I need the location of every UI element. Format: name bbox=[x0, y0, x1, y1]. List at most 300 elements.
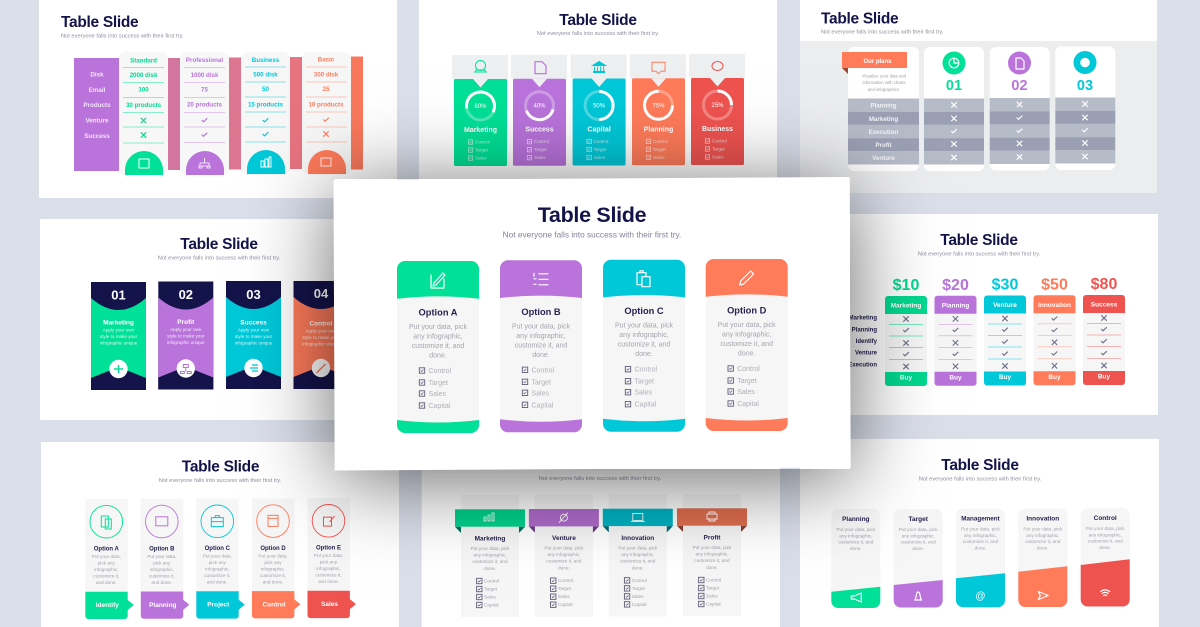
card Marketing: Target bbox=[484, 586, 498, 592]
plans label column: Planning bbox=[870, 102, 897, 110]
column $30 Venture bbox=[984, 276, 1026, 386]
option title: Option A bbox=[419, 308, 458, 318]
checklist: Target bbox=[532, 379, 551, 386]
card Profit bbox=[677, 494, 747, 616]
subtitle: Not everyone falls into success with their first try. bbox=[537, 31, 660, 37]
checklist bbox=[419, 368, 452, 410]
card 04 Control: Control bbox=[309, 320, 333, 328]
column: Basic: 25 bbox=[323, 86, 330, 93]
column $20 Planning bbox=[934, 277, 976, 386]
column $50 Innovation: $50 bbox=[1041, 276, 1068, 293]
card 02 Profit: style to make your bbox=[167, 334, 205, 338]
card Innovation: done. bbox=[632, 565, 644, 570]
card 02 Profit: infographic unique bbox=[167, 340, 205, 345]
column: Business: 500 disk bbox=[253, 72, 278, 78]
description: any infographic, bbox=[516, 333, 566, 340]
row label column: Venture bbox=[85, 118, 109, 124]
card Management: @ bbox=[975, 591, 986, 602]
card: Planning: Control bbox=[653, 139, 668, 144]
icon: pencil bbox=[740, 271, 754, 285]
description: customize it, and bbox=[618, 342, 670, 349]
column: Professional bbox=[180, 52, 229, 175]
card 01 Marketing: infographic unique bbox=[100, 340, 138, 346]
option E Sales: and done. bbox=[318, 579, 339, 584]
card 04 Control: infographic unique bbox=[302, 342, 340, 346]
card Planning: any infographic, bbox=[839, 534, 872, 538]
description: Put your data, pick bbox=[512, 323, 570, 330]
card Innovation: Sales bbox=[632, 594, 644, 599]
card Innovation: Innovation bbox=[1026, 516, 1059, 522]
column $10 Marketing: Buy bbox=[900, 374, 913, 382]
description: done. bbox=[429, 352, 447, 360]
option C Project: Put your data, bbox=[203, 554, 232, 559]
card Control: Put your data, pick bbox=[1086, 526, 1125, 531]
option C Project: and done. bbox=[207, 580, 228, 585]
card: Success: Success bbox=[525, 127, 554, 134]
option C Project bbox=[196, 499, 245, 619]
option C Project: Option C bbox=[205, 546, 231, 552]
option title: Option D bbox=[727, 306, 767, 316]
card Venture: Put your data, pick bbox=[544, 546, 584, 551]
title: Table Slide bbox=[61, 14, 139, 31]
plan 01 bbox=[924, 47, 984, 171]
option A Identify: infographic, bbox=[94, 567, 118, 572]
description bbox=[409, 324, 467, 360]
checklist: Control bbox=[532, 367, 555, 374]
card Marketing: Put your data, pick bbox=[471, 546, 510, 551]
column: Professional: 75 bbox=[201, 86, 208, 94]
column $10 Marketing: Marketing bbox=[891, 302, 921, 310]
option D Control: customize it, bbox=[260, 573, 286, 578]
card Innovation: Control bbox=[632, 578, 647, 583]
card Target: Target bbox=[909, 516, 929, 523]
option B Planning: Option B bbox=[149, 546, 175, 552]
option C Project: infographic, bbox=[205, 567, 229, 572]
subtitle: Not everyone falls into success with their first try. bbox=[918, 252, 1041, 258]
option E Sales: Option E bbox=[316, 546, 341, 552]
column: Basic: 10 products bbox=[308, 102, 344, 108]
checklist: Capital bbox=[532, 402, 554, 409]
card Innovation: customize it, and bbox=[620, 558, 656, 563]
checklist: Sales bbox=[634, 390, 653, 397]
card Innovation: any infographic, bbox=[621, 552, 654, 557]
icon: note edit bbox=[431, 273, 445, 288]
card: Capital: Control bbox=[594, 139, 608, 144]
plan 02 bbox=[990, 47, 1050, 170]
checklist: Sales bbox=[737, 389, 755, 396]
card Profit: Sales bbox=[706, 594, 718, 598]
card Management: Put your data, pick bbox=[961, 527, 1001, 532]
panel: option arrows slide bbox=[41, 442, 399, 627]
title: Table Slide bbox=[538, 203, 647, 227]
column $10 Marketing bbox=[885, 277, 927, 386]
option A Identify: and done. bbox=[96, 580, 117, 585]
card Planning: done. bbox=[850, 546, 862, 551]
option E Sales bbox=[308, 498, 356, 618]
subtitle: Not everyone falls into success with their first try. bbox=[158, 256, 281, 262]
option C Project: customize it, bbox=[204, 573, 230, 578]
plan 03: 03 bbox=[1077, 78, 1093, 94]
option B Planning: Planning bbox=[149, 602, 177, 609]
card Target bbox=[894, 509, 943, 608]
panel: numbered cards slide bbox=[40, 219, 348, 420]
subtitle: Not everyone falls into success with their first try. bbox=[539, 476, 662, 482]
card Innovation: Put your data, pick bbox=[1023, 526, 1063, 532]
option C Project: Project bbox=[207, 602, 230, 609]
card 03 Success: 03 bbox=[246, 287, 261, 302]
card 03 Success: Success bbox=[240, 320, 267, 326]
plans label column: Venture bbox=[872, 155, 895, 162]
plans label column bbox=[842, 47, 919, 171]
column $50 Innovation bbox=[1034, 276, 1076, 385]
card Innovation bbox=[603, 494, 673, 616]
card Innovation: done. bbox=[1037, 546, 1049, 550]
card Target: customize it, and bbox=[901, 540, 936, 544]
option D Control bbox=[252, 498, 300, 618]
row label column: Success bbox=[84, 133, 110, 140]
option E Sales: pick any bbox=[320, 560, 338, 565]
card Marketing: Marketing bbox=[475, 536, 505, 542]
option A Identify: Put your data, bbox=[92, 554, 121, 559]
checklist bbox=[522, 367, 555, 409]
card Planning: customize it, and bbox=[838, 540, 874, 544]
column: Basic: 300 disk bbox=[314, 72, 339, 78]
column: Business bbox=[241, 52, 290, 175]
card: Planning: Planning bbox=[644, 126, 673, 133]
card Profit: Control bbox=[706, 578, 721, 582]
plan 02: 02 bbox=[1011, 78, 1028, 94]
plan 03 bbox=[1055, 46, 1115, 170]
column: Standard bbox=[119, 52, 168, 175]
card: Planning bbox=[630, 54, 686, 165]
title: Table Slide bbox=[941, 457, 1019, 474]
column: Standard: 100 bbox=[138, 86, 149, 94]
checklist: Target bbox=[428, 380, 448, 387]
card Venture: any infographic, bbox=[547, 552, 580, 557]
column: Professional: 1000 disk bbox=[191, 72, 219, 79]
column $80 Success: Success bbox=[1091, 302, 1118, 308]
checklist bbox=[728, 366, 760, 408]
row labels: Venture bbox=[855, 350, 878, 356]
card: Business: Control bbox=[712, 138, 727, 144]
card Control: Control bbox=[1094, 515, 1117, 522]
card Marketing: customize it, and bbox=[472, 559, 508, 564]
card Management: Management bbox=[961, 516, 1001, 523]
description: customize it, and bbox=[412, 343, 464, 350]
icon: clipboard bbox=[637, 271, 650, 287]
description: done. bbox=[532, 352, 550, 359]
card: Success: Sales bbox=[534, 155, 546, 160]
description: done. bbox=[635, 351, 653, 358]
card: Marketing: Control bbox=[475, 140, 490, 144]
row labels: Marketing bbox=[849, 316, 877, 322]
panel: percent cards slide bbox=[419, 0, 777, 182]
column: Standard: 2000 disk bbox=[130, 72, 158, 79]
plans label column: Profit bbox=[875, 142, 892, 149]
column: Business: Business bbox=[252, 57, 280, 64]
card 03 Success: style to make your bbox=[235, 334, 273, 339]
description: any infographic, bbox=[722, 332, 771, 338]
plans label column: information with charts bbox=[862, 80, 906, 85]
card Planning bbox=[831, 509, 880, 608]
card: Capital: Target bbox=[594, 147, 607, 152]
option B Planning: customize it, bbox=[149, 573, 175, 578]
option E Sales: customize it, bbox=[315, 573, 342, 578]
description: any infographic, bbox=[619, 332, 669, 339]
card: Planning: Sales bbox=[653, 155, 665, 160]
option title: Option B bbox=[521, 307, 561, 317]
plans label column: Visualize your data and bbox=[862, 74, 907, 78]
card Management bbox=[956, 509, 1005, 607]
card: Success: 40% bbox=[533, 104, 546, 110]
plan 01: 01 bbox=[946, 78, 962, 94]
description: done. bbox=[738, 350, 756, 358]
option D Control: Option D bbox=[260, 546, 286, 552]
column $50 Innovation: Innovation bbox=[1038, 302, 1071, 309]
card: Capital: 50% bbox=[593, 104, 606, 110]
card Innovation: customize it, and bbox=[1025, 539, 1061, 544]
checklist: Target bbox=[634, 379, 654, 386]
column $20 Planning: Planning bbox=[942, 302, 969, 309]
description bbox=[615, 323, 673, 358]
checklist bbox=[625, 366, 658, 409]
option A Identify: customize it, bbox=[93, 574, 119, 578]
card Venture bbox=[529, 495, 599, 617]
card Target: Put your data, pick bbox=[899, 527, 938, 532]
card Control: any infographic, bbox=[1089, 532, 1122, 538]
subtitle: Not everyone falls into success with their first try. bbox=[503, 230, 681, 240]
card Profit: Capital bbox=[706, 602, 721, 606]
subtitle: Not everyone falls into success with their first try. bbox=[821, 30, 944, 36]
checklist: Capital bbox=[737, 401, 759, 408]
panel: pricing table slide bbox=[39, 0, 397, 198]
option card D bbox=[706, 259, 788, 431]
checklist: Control bbox=[428, 368, 452, 375]
option C Project: pick any bbox=[209, 560, 227, 565]
description bbox=[512, 323, 570, 359]
column: Basic: Basic bbox=[318, 56, 335, 64]
option E Sales: infographic, bbox=[316, 566, 341, 571]
column $10 Marketing: $10 bbox=[893, 277, 919, 294]
card Venture: done. bbox=[558, 566, 570, 571]
card Management: done. bbox=[975, 546, 986, 551]
title: Table Slide bbox=[561, 454, 639, 471]
card 04 Control: Apply your own bbox=[305, 328, 337, 334]
title: Table Slide bbox=[559, 12, 637, 29]
card 04 Control: style to make your bbox=[302, 335, 340, 340]
checklist: Sales bbox=[428, 391, 447, 398]
card: Marketing bbox=[452, 55, 508, 166]
card Profit: done. bbox=[706, 565, 718, 570]
title: Table Slide bbox=[821, 10, 899, 28]
card 02 Profit: Profit bbox=[177, 319, 195, 326]
panel: ribbon cards slide bbox=[422, 454, 780, 627]
option D Control: infographic, bbox=[261, 566, 285, 571]
card 04 Control: 04 bbox=[314, 286, 329, 301]
column: Professional: Professional bbox=[186, 57, 223, 64]
column: Business: 15 products bbox=[248, 102, 284, 108]
option E Sales: Sales bbox=[321, 601, 338, 608]
card Marketing: Sales bbox=[484, 594, 496, 600]
title: Table Slide bbox=[940, 232, 1018, 249]
card Planning: Planning bbox=[842, 516, 870, 523]
plans label column: Marketing bbox=[869, 116, 898, 123]
option D Control: and done. bbox=[263, 579, 283, 584]
separator bars bbox=[168, 56, 363, 170]
column $80 Success: $80 bbox=[1091, 276, 1117, 293]
card Control: done. bbox=[1099, 545, 1111, 550]
title: Table Slide bbox=[180, 236, 258, 253]
plans label column: Execution bbox=[869, 129, 899, 136]
description: Put your data, pick bbox=[615, 323, 673, 330]
description: Put your data, pick bbox=[409, 324, 467, 331]
column $80 Success bbox=[1083, 276, 1125, 385]
checklist: Capital bbox=[428, 403, 451, 410]
card Venture: Sales bbox=[558, 594, 570, 599]
option E Sales: Put your data, bbox=[314, 553, 343, 558]
option D Control: Control bbox=[262, 601, 286, 608]
card: Business: 25% bbox=[711, 103, 724, 109]
option A Identify bbox=[85, 499, 134, 619]
option D Control: pick any bbox=[264, 560, 282, 565]
description: Put your data, pick bbox=[718, 322, 776, 329]
card: Success: Control bbox=[534, 139, 549, 144]
card: Marketing: Marketing bbox=[464, 127, 497, 134]
row label column: Email bbox=[89, 87, 106, 94]
card: Capital: Capital bbox=[587, 126, 611, 134]
card: Marketing: 60% bbox=[474, 104, 487, 110]
card Target: done. bbox=[912, 546, 924, 551]
card Control: customize it, and bbox=[1088, 538, 1123, 544]
card 01 Marketing: Apply your own bbox=[103, 328, 135, 332]
card 03 Success bbox=[226, 281, 281, 389]
card: Planning: Target bbox=[653, 147, 666, 152]
card Marketing bbox=[455, 495, 525, 617]
card Profit: Profit bbox=[704, 534, 721, 542]
column $30 Venture: $30 bbox=[992, 276, 1018, 294]
row labels bbox=[848, 316, 878, 368]
card Planning: Put your data, pick bbox=[836, 527, 876, 532]
row labels: Execution bbox=[848, 362, 877, 368]
card: Business: Business bbox=[702, 126, 733, 133]
checklist: Target bbox=[737, 378, 757, 385]
card: Business bbox=[689, 54, 745, 165]
card 03 Success: Apply your own bbox=[238, 328, 270, 332]
card Innovation bbox=[1018, 508, 1067, 607]
card 02 Profit: Apply your own bbox=[170, 327, 202, 332]
panel: central featured slide bbox=[334, 177, 851, 470]
card Profit: any infographic, bbox=[695, 552, 729, 556]
card Venture: Capital bbox=[558, 602, 572, 607]
column: Standard: Standard bbox=[130, 58, 157, 64]
card Innovation: any infographic, bbox=[1026, 533, 1059, 538]
checklist: Sales bbox=[532, 390, 550, 397]
option B Planning: and done. bbox=[151, 580, 172, 585]
row label column: Disk bbox=[90, 72, 104, 78]
card Marketing: any infographic, bbox=[473, 552, 507, 558]
description: any infographic, bbox=[413, 334, 463, 340]
checklist: Control bbox=[737, 366, 760, 373]
row labels: Identify bbox=[856, 339, 878, 345]
column $30 Venture: Buy bbox=[999, 374, 1012, 381]
card: Marketing: Sales bbox=[475, 156, 487, 160]
column: Business: 50 bbox=[262, 86, 269, 93]
column $20 Planning: $20 bbox=[942, 277, 969, 294]
option B Planning: pick any bbox=[153, 560, 171, 565]
card Marketing: done. bbox=[484, 566, 496, 571]
card 02 Profit bbox=[158, 282, 213, 390]
card: Business: Sales bbox=[712, 154, 724, 160]
option card B bbox=[500, 260, 582, 432]
title: Table Slide bbox=[182, 458, 260, 476]
card Management: any infographic, bbox=[964, 533, 997, 538]
card Management: customize it, and bbox=[963, 539, 998, 544]
subtitle: Not everyone falls into success with their first try. bbox=[61, 34, 184, 40]
card Innovation: Innovation bbox=[621, 535, 654, 542]
row label column bbox=[74, 58, 119, 171]
card Profit: Put your data, pick bbox=[693, 545, 732, 550]
panel: price list slide bbox=[840, 214, 1158, 415]
row label column: Products bbox=[83, 102, 111, 109]
card: Success bbox=[511, 55, 567, 166]
card Profit: Target bbox=[706, 586, 720, 590]
card 01 Marketing: 01 bbox=[111, 288, 126, 302]
checklist: Capital bbox=[634, 402, 657, 409]
option B Planning: Put your data, bbox=[147, 554, 176, 559]
card: Capital bbox=[571, 54, 627, 166]
subtitle: Not everyone falls into success with their first try. bbox=[159, 478, 282, 484]
panel: slanted cards slide bbox=[800, 439, 1159, 627]
card 02 Profit: 02 bbox=[179, 287, 193, 302]
column: Standard: 30 products bbox=[126, 102, 162, 109]
column $20 Planning: Buy bbox=[949, 374, 962, 381]
card: Planning: 75% bbox=[652, 103, 665, 109]
card Profit: customize it, and bbox=[694, 558, 730, 563]
option A Identify: Option A bbox=[94, 546, 120, 552]
column: Basic bbox=[302, 52, 351, 175]
option card A bbox=[397, 261, 479, 433]
description: customize it, and bbox=[515, 342, 567, 349]
row labels: Planning bbox=[852, 328, 877, 334]
card Control bbox=[1081, 508, 1130, 606]
option A Identify: Identify bbox=[96, 602, 119, 609]
card Venture: Venture bbox=[552, 535, 576, 542]
card: Marketing: Target bbox=[475, 148, 488, 152]
card Venture: customize it, and bbox=[546, 559, 582, 564]
card 01 Marketing: Marketing bbox=[103, 320, 134, 326]
column $50 Innovation: Buy bbox=[1048, 374, 1061, 381]
card Target: any infographic, bbox=[902, 534, 935, 538]
checklist: Control bbox=[634, 367, 658, 374]
card: Business: Target bbox=[712, 146, 725, 152]
description: customize it, and bbox=[720, 341, 773, 348]
card Innovation: Put your data, pick bbox=[618, 545, 658, 550]
card 01 Marketing bbox=[91, 282, 146, 390]
option B Planning bbox=[141, 499, 189, 619]
subtitle: Not everyone falls into success with their first try. bbox=[919, 476, 1042, 482]
plans label column: and infographics. bbox=[868, 87, 900, 92]
column $80 Success: Buy bbox=[1098, 374, 1111, 380]
plans label column: Our plans bbox=[863, 59, 892, 65]
option title: Option C bbox=[624, 306, 664, 316]
option A Identify: pick any bbox=[98, 560, 116, 566]
card Venture: Control bbox=[558, 578, 573, 583]
card 01 Marketing: style to make your bbox=[100, 334, 138, 339]
card: Capital: Sales bbox=[594, 155, 606, 160]
description bbox=[718, 322, 776, 358]
card Innovation: Capital bbox=[632, 602, 646, 607]
card Innovation: Target bbox=[632, 586, 646, 591]
